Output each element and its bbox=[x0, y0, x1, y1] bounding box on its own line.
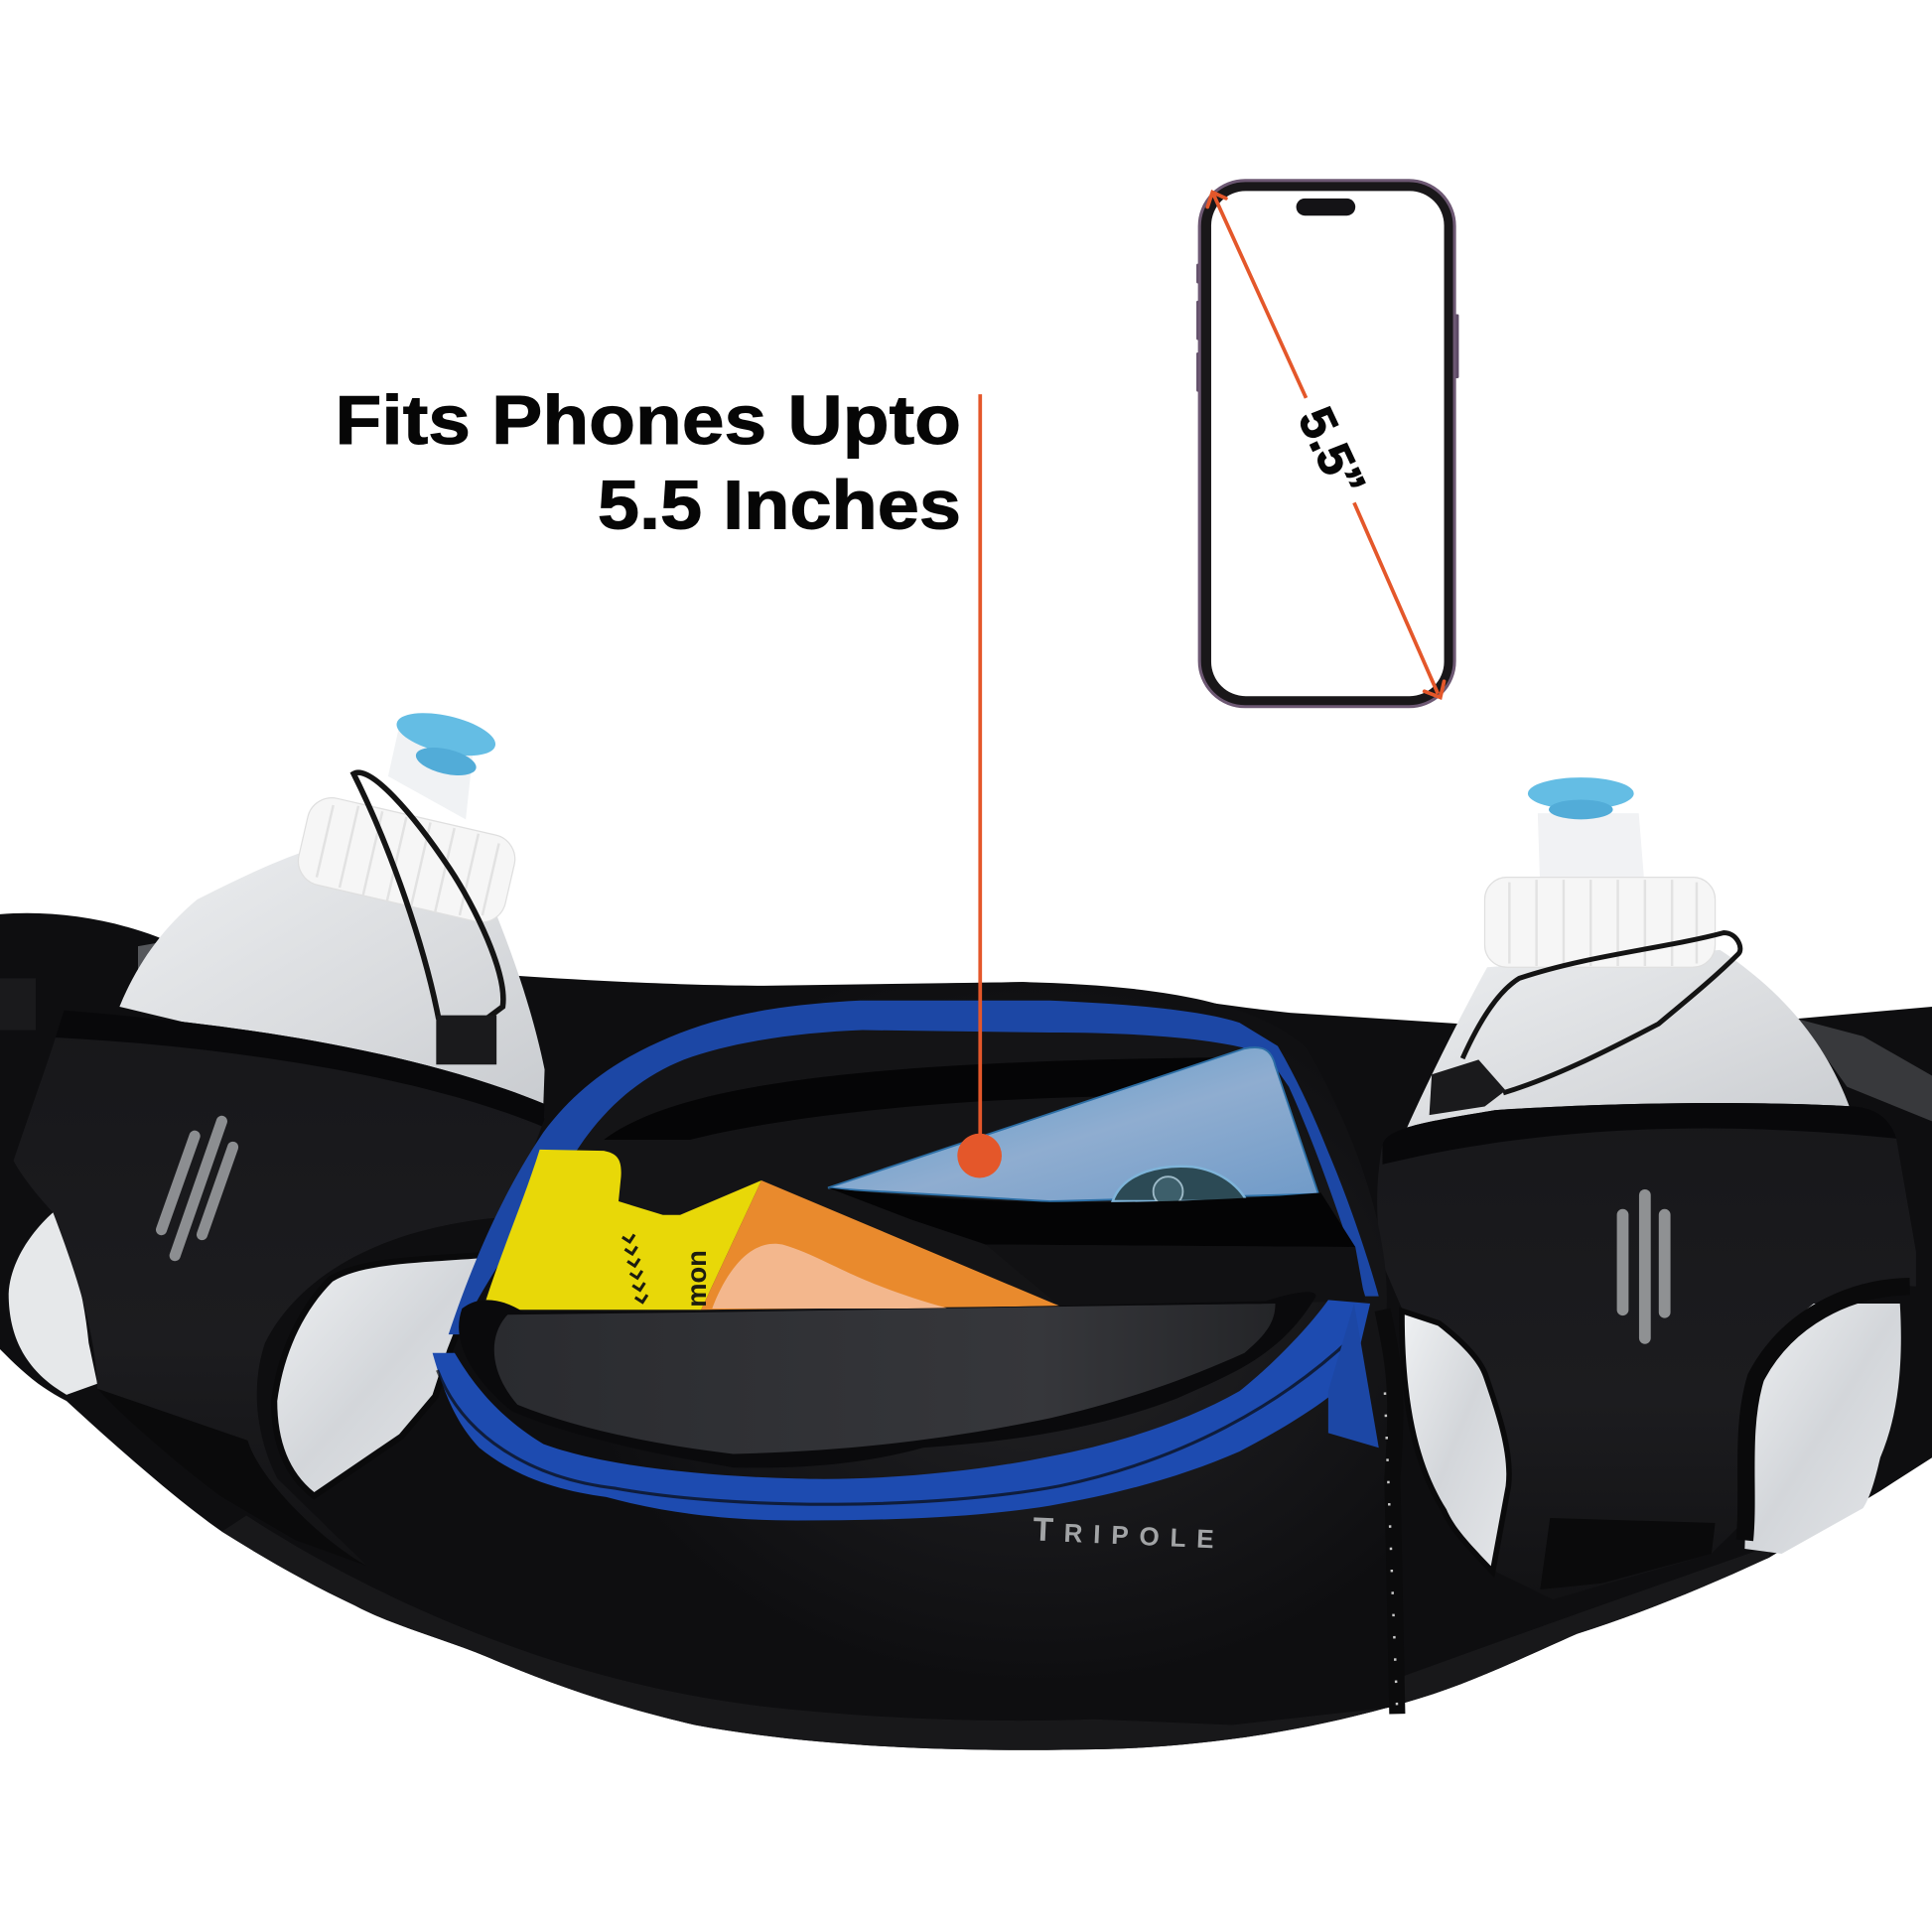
phone size label: 5.5” bbox=[1288, 399, 1376, 505]
grey strap left bbox=[138, 941, 167, 976]
pouch inner lining bbox=[481, 1023, 1368, 1309]
left reflective logo bbox=[162, 1121, 233, 1256]
left strap loop bbox=[0, 978, 36, 1031]
right pocket mesh bbox=[1540, 1518, 1716, 1589]
heading: 5.5 Inches bbox=[598, 466, 961, 543]
right reflective logo bbox=[1622, 1195, 1665, 1338]
left water bottle bbox=[9, 705, 545, 1395]
inner pocket band bbox=[828, 1187, 1355, 1247]
front flap bbox=[459, 1292, 1315, 1467]
energy gel packs: mon bbox=[681, 1250, 712, 1308]
left bottle window bbox=[277, 1258, 483, 1492]
zipper pull cord bbox=[1382, 1310, 1397, 1714]
energy gel packs bbox=[483, 1150, 1059, 1310]
phone camera island bbox=[1297, 199, 1355, 215]
lower edging bbox=[221, 1516, 1769, 1750]
right water bottle bbox=[1407, 777, 1851, 1128]
right bottle window right bbox=[1744, 1304, 1901, 1554]
left bottle cord bbox=[353, 772, 503, 1019]
brand label: T RIPOLE bbox=[1033, 1511, 1215, 1556]
inner pocket rim bbox=[604, 1057, 1269, 1140]
blue zipper upper bbox=[449, 1001, 1379, 1334]
phone in pocket bbox=[828, 1047, 1318, 1206]
left bottle cap bbox=[393, 705, 499, 763]
phone camera bbox=[1113, 1167, 1247, 1201]
blue zipper lower bbox=[433, 1300, 1370, 1520]
right bottle pocket bbox=[1377, 1103, 1916, 1599]
callout leader line bbox=[957, 394, 1002, 1177]
heading: Fits Phones Upto bbox=[336, 381, 961, 459]
right bottle window left bbox=[1405, 1314, 1506, 1566]
left bottle pocket bbox=[14, 1011, 548, 1566]
left pocket mesh bbox=[97, 1389, 367, 1566]
waist belt product bbox=[0, 705, 1932, 1750]
heading bbox=[336, 381, 961, 543]
centre pouch bbox=[433, 982, 1399, 1725]
belt body bbox=[0, 913, 1932, 1750]
grey strap right bbox=[1798, 1019, 1932, 1121]
right bottle cap bbox=[1528, 777, 1634, 809]
right bottle cord bbox=[1462, 932, 1740, 1093]
phone size diagram bbox=[1196, 181, 1458, 707]
bottle bulge seen left of pocket bbox=[9, 1212, 97, 1395]
diagonal measurement arrow bbox=[1207, 193, 1445, 697]
